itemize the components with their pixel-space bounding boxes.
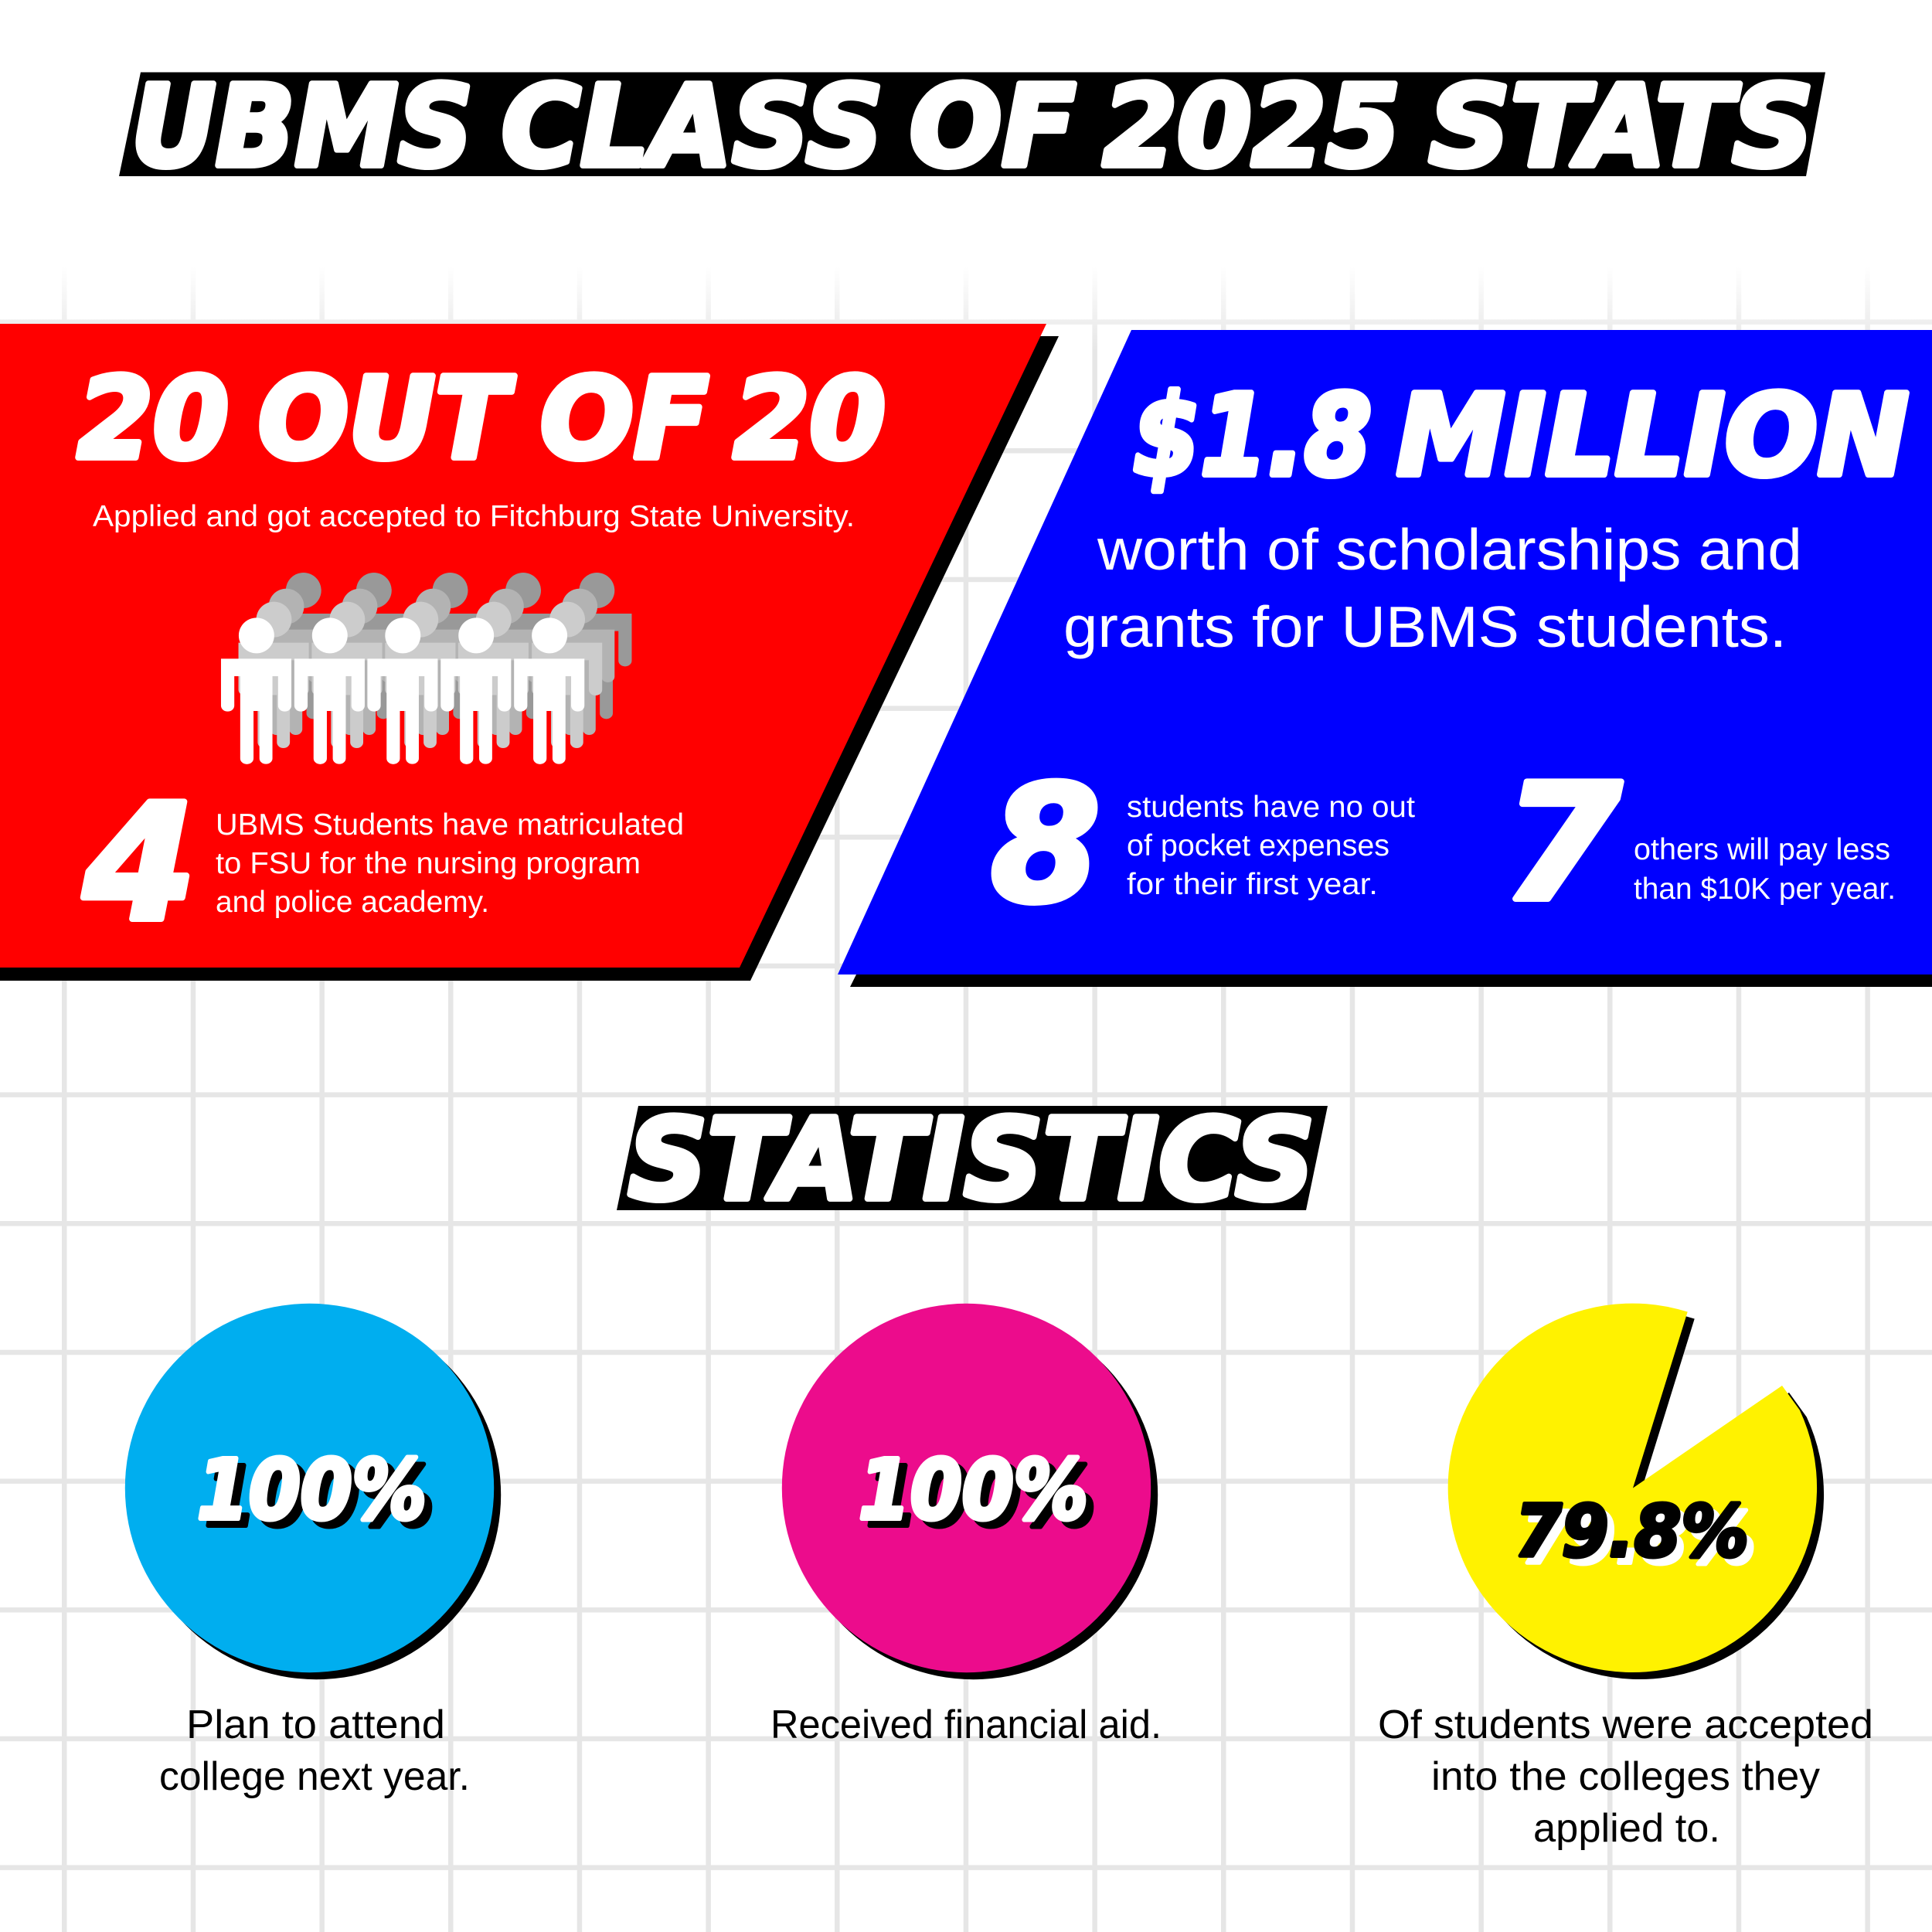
text: plan to attend: Plan to attend — [186, 1702, 445, 1747]
heading: 20 out of 20: OUT — [258, 354, 515, 485]
chart: blue circle 100%: 100% — [197, 1443, 427, 1539]
heading: $1.8 million: MILLION — [1396, 371, 1909, 502]
text: less than 10K: others will pay less — [1634, 833, 1890, 866]
text: plan to attend — [159, 1702, 470, 1799]
title — [119, 62, 1825, 192]
chart: pink circle 100%: 100% — [866, 1450, 1096, 1546]
chart: blue circle 100% — [125, 1304, 501, 1679]
heading: 20 out of 20: OF — [540, 354, 709, 485]
chart: pink circle 100% — [782, 1304, 1158, 1679]
heading: $1.8 million: $1.8 — [1133, 371, 1372, 502]
text: accepted into colleges: Of students were accepted — [1378, 1702, 1873, 1747]
text: no out of pocket: of pocket expenses — [1127, 829, 1389, 862]
number: 4: 4 — [83, 770, 196, 957]
heading: 20 out of 20 — [77, 354, 886, 485]
text: less than 10K — [1634, 833, 1896, 906]
text: no out of pocket — [1127, 791, 1415, 901]
panel: red acceptance — [0, 324, 1059, 981]
text: matriculated: UBMS Students have matriculated — [216, 808, 684, 842]
title: UBMS — [131, 62, 473, 192]
text: financial aid: Received financial aid. — [770, 1702, 1162, 1747]
text: less than 10K: than $10K per year. — [1634, 872, 1896, 906]
number: 8: 8 — [991, 752, 1100, 939]
chart: yellow pie 79.8% — [1448, 1304, 1824, 1679]
text: worth of scholarships: grants for UBMS students. — [1063, 594, 1787, 659]
chart: blue circle 100%: 100% — [205, 1450, 434, 1546]
chart: pink circle 100%: 100% — [859, 1443, 1088, 1539]
text: matriculated — [216, 808, 684, 919]
text: matriculated: and police academy. — [216, 886, 489, 919]
title: OF — [910, 62, 1076, 192]
text: plan to attend: college next year. — [159, 1754, 470, 1799]
title: 2025 — [1103, 62, 1400, 192]
title: STATS — [1429, 62, 1814, 192]
text: accepted to Fitchburg State: Applied and got accepted to Fitchburg State University. — [93, 500, 855, 533]
number: 7: 7 — [1502, 750, 1621, 937]
heading: $1.8 million — [1133, 371, 1909, 502]
text: no out of pocket: for their first year. — [1127, 868, 1378, 901]
text: accepted into colleges: applied to. — [1533, 1806, 1720, 1851]
panel: blue scholarships — [838, 330, 1932, 987]
icon: rows of people — [221, 573, 631, 764]
text: matriculated: to FSU for the nursing program — [216, 847, 641, 880]
heading: 20 out of 20: 20 — [733, 354, 886, 485]
chart: yellow pie 79.8%: 79.8% — [1515, 1490, 1749, 1573]
text: accepted into colleges — [1378, 1702, 1873, 1851]
title: CLASS — [502, 62, 883, 192]
heading: 20 out of 20: 20 — [77, 354, 229, 485]
text: worth of scholarships — [1063, 517, 1802, 659]
chart: yellow pie 79.8%: 79.8% — [1522, 1496, 1756, 1580]
text: worth of scholarships: worth of scholarships and — [1097, 517, 1802, 582]
text: no out of pocket: students have no out — [1127, 791, 1415, 824]
text: accepted into colleges: into the colleges they — [1431, 1754, 1820, 1799]
heading: statistics: STATISTICS — [628, 1095, 1315, 1226]
